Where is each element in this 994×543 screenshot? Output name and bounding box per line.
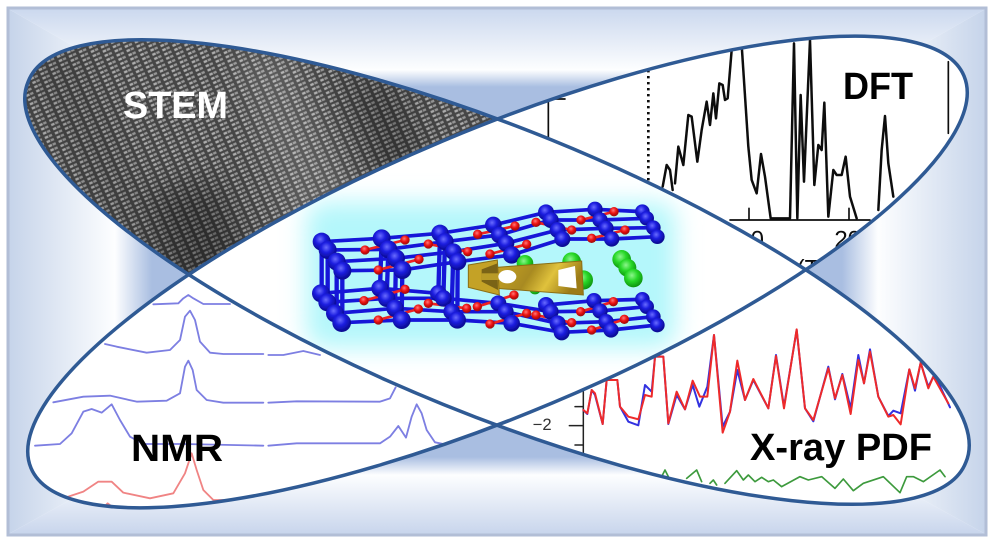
DFT axis tick labels: (T [797, 256, 820, 283]
NMR red spectrum [68, 453, 233, 506]
DFT dotted reference line [644, 70, 652, 182]
panel: central crystal structure lens [292, 188, 800, 362]
X-ray PDF axis [569, 392, 583, 453]
X-ray PDF red fitted curve [583, 329, 948, 433]
panel: STEM micrograph [26, 42, 492, 272]
blue framework bonds [321, 209, 657, 332]
DFT axis tick labels: 20 [834, 226, 861, 253]
red oxygen atoms [359, 207, 630, 335]
label: DFT: DFT [843, 66, 913, 108]
panel: DFT density of states chart [548, 40, 948, 283]
cyan glow behind the structure [306, 202, 676, 348]
NMR blue spectra [35, 295, 443, 446]
label: STEM: STEM [123, 85, 228, 127]
DFT axis tick labels: 0 [751, 226, 764, 253]
crystal structure [312, 202, 665, 340]
panel: NMR spectra [35, 295, 443, 506]
red oxygen bonds [364, 212, 625, 330]
green ions [517, 250, 643, 294]
DFT left axis [548, 98, 565, 138]
DFT axis tick labels [752, 230, 857, 265]
X-ray PDF blue measured curve [583, 330, 950, 427]
panel: X-ray PDF chart [533, 329, 950, 493]
X-ray PDF green difference curve [662, 470, 945, 493]
DFT curve [663, 40, 893, 218]
X-ray PDF tick label: −2 [533, 415, 552, 434]
blue framework atoms [312, 202, 665, 340]
label: NMR: NMR [131, 428, 223, 470]
gold ion channel tip [468, 260, 583, 295]
central white lens [752, 238, 800, 273]
label: X-ray PDF: X-ray PDF [750, 427, 932, 469]
DFT baseline axis [730, 62, 948, 220]
